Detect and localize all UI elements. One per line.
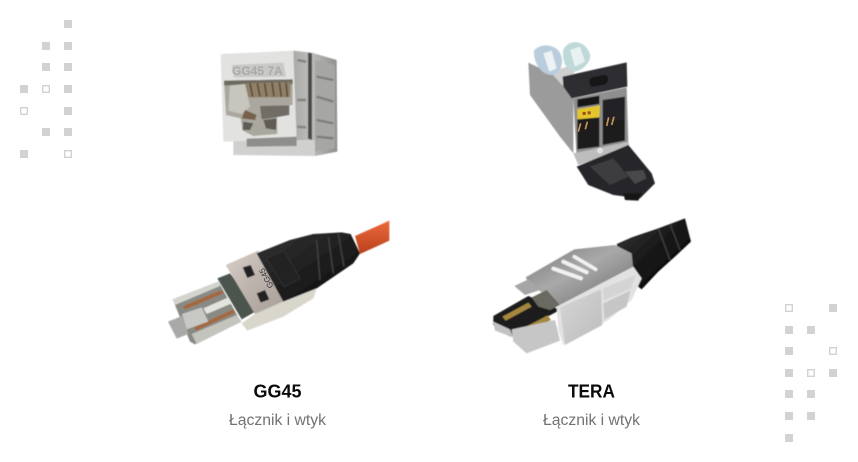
orange cable	[355, 221, 389, 254]
image: GG45 plug	[168, 221, 389, 344]
black cable	[617, 218, 691, 289]
boot	[257, 232, 360, 302]
plug front bodies	[493, 322, 513, 337]
image: GG45 socket: GG45 7A	[232, 64, 283, 78]
side shell	[557, 267, 642, 345]
image: GG45 socket	[221, 51, 337, 156]
decorative squares: top left	[20, 20, 72, 158]
decorative squares: bottom right	[785, 304, 837, 442]
image: TERA socket	[528, 42, 655, 201]
upper shell	[526, 245, 633, 305]
label: TERA	[543, 382, 640, 429]
subtitle: TERA: Łącznik i wtyk	[543, 412, 640, 429]
plate slots	[243, 265, 255, 278]
heading: TERA: TERA	[568, 382, 615, 402]
contacts and plug front	[173, 282, 240, 344]
image: GG45 plug: GG45	[257, 266, 275, 290]
heading: GG45: GG45	[254, 382, 302, 402]
metal plate and shell	[242, 288, 317, 331]
grey collar	[217, 273, 258, 319]
label: GG45	[229, 382, 326, 429]
subtitle: GG45: Łącznik i wtyk	[229, 412, 326, 429]
image: TERA plug	[493, 218, 691, 353]
contacts	[493, 296, 560, 337]
